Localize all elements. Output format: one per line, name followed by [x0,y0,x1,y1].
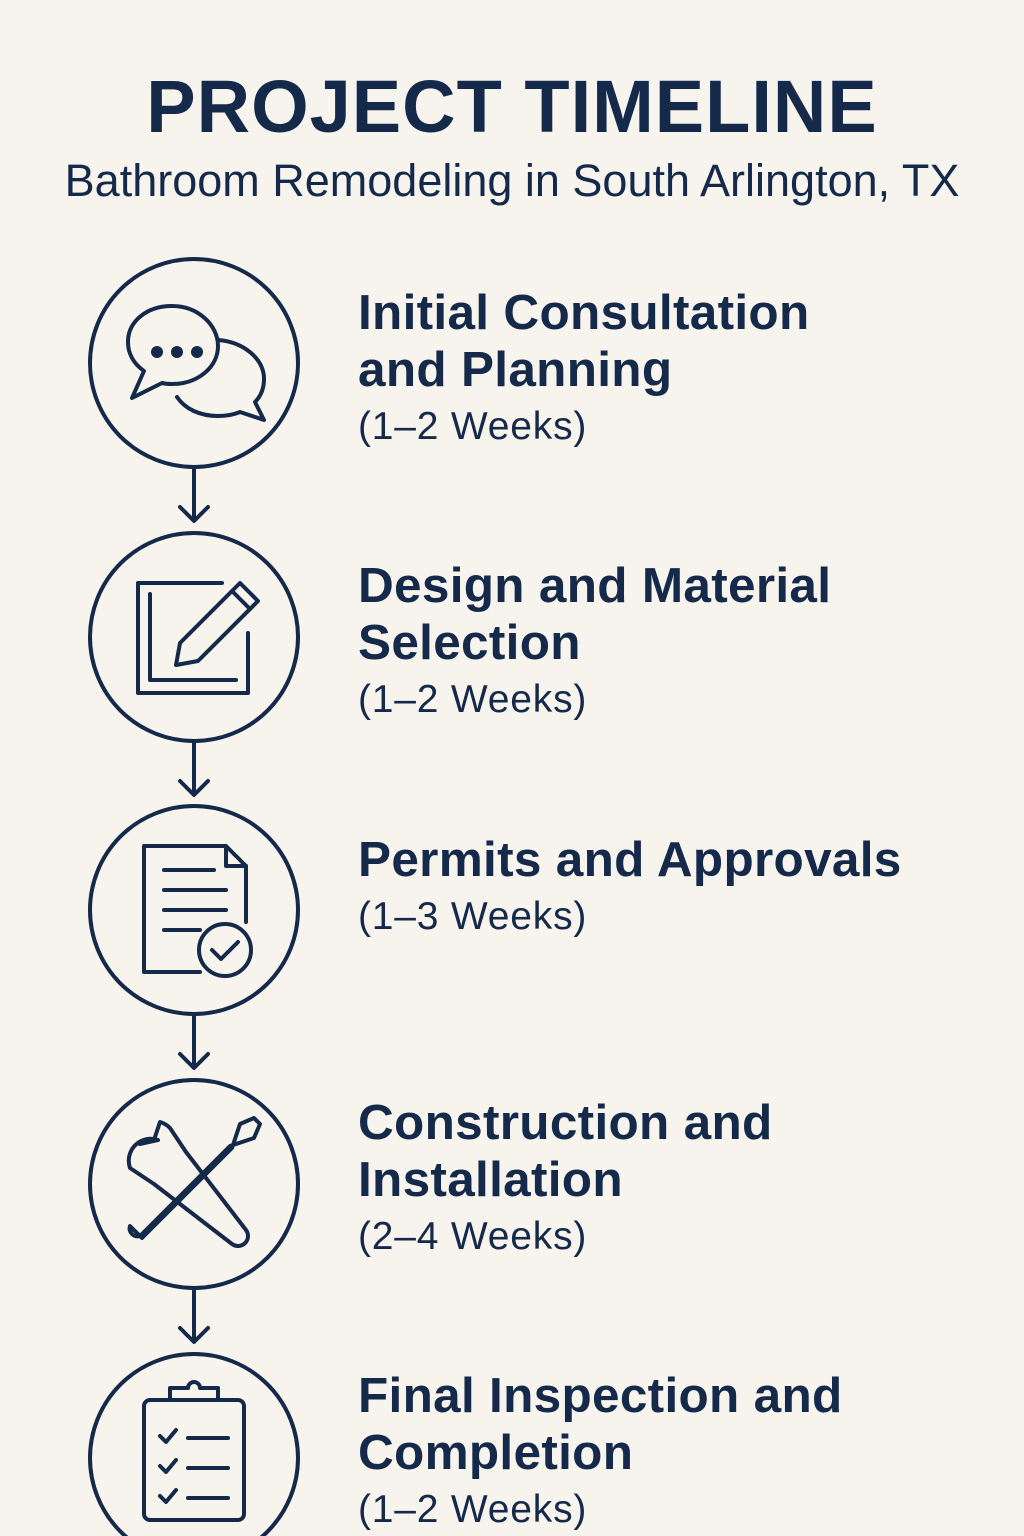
step 5 text: (1–2 Weeks) [358,1488,587,1531]
arrow 2 [180,741,208,795]
step 5 text [358,1368,843,1531]
step 3 text: Permits and Approvals [358,832,902,887]
icon: tools [90,1080,298,1288]
step 1 text: Initial Consultation [358,285,809,340]
subtitle: Bathroom Remodeling in South Arlington, TX [65,155,959,206]
step 1 text: and Planning [358,342,672,397]
step 1 text: (1–2 Weeks) [358,405,587,448]
step 2 text: (1–2 Weeks) [358,678,587,721]
step 4 text: Installation [358,1152,623,1207]
icon: document check [90,806,298,1014]
step 3 text: (1–3 Weeks) [358,895,587,938]
step 2 text: Design and Material [358,558,831,613]
step 1 text [358,285,809,448]
step 3 text [358,832,902,938]
title: PROJECT TIMELINE [146,65,878,148]
step 4 text: (2–4 Weeks) [358,1215,587,1258]
step 4 text: Construction and [358,1095,773,1150]
icon: clipboard [90,1354,298,1536]
arrow 1 [180,467,208,521]
step 2 text [358,558,831,721]
arrow 4 [180,1288,208,1342]
step 4 text [358,1095,773,1258]
icon: chat bubbles [90,259,298,467]
step 5 text: Completion [358,1425,633,1480]
step 2 text: Selection [358,615,581,670]
step 5 text: Final Inspection and [358,1368,843,1423]
icon: design edit [90,533,298,741]
arrow 3 [180,1014,208,1068]
